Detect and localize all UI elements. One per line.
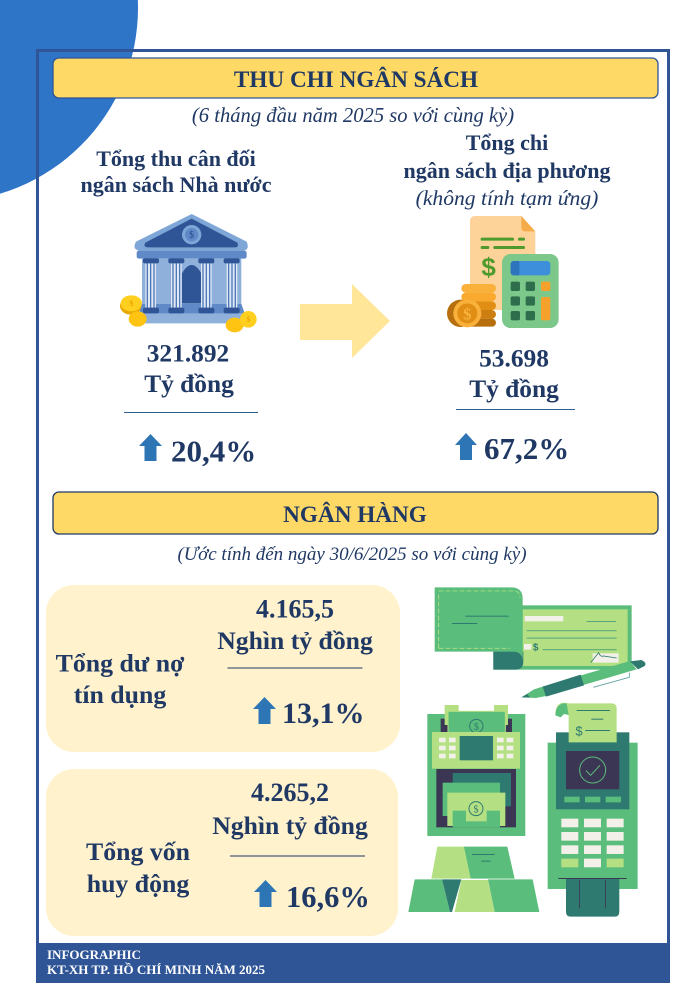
arrow: revenue to expenditure — [300, 284, 390, 358]
panel: mobilized capital — [46, 769, 398, 936]
icon: bank building: $ — [129, 299, 133, 308]
footer band — [36, 943, 670, 983]
panel: credit balance: 13,1% — [282, 697, 364, 730]
change: expenditure growth: 67,2% — [484, 431, 569, 466]
icon: invoice, coins and calculator — [447, 216, 559, 328]
icon: bank building: $ — [189, 230, 194, 241]
heading: total revenue: ngân sách Nhà nước — [80, 172, 272, 197]
heading: total revenue — [80, 146, 272, 197]
icon: invoice, coins and calculator: $ — [463, 304, 471, 323]
panel: credit balance: Nghìn tỷ đồng — [217, 626, 373, 655]
decorative blue circle — [0, 0, 138, 202]
panel: credit balance: tín dụng — [74, 680, 166, 709]
heading: total expenditure: (không tính tạm ứng) — [416, 186, 598, 210]
change: revenue growth: 20,4% — [171, 434, 256, 468]
subtitle: period: (6 tháng đầu năm 2025 so với cùng kỳ) — [192, 105, 514, 127]
heading: total expenditure: Tổng chi — [466, 130, 548, 155]
icon: cash counting machine: $ — [474, 722, 479, 733]
heading: total expenditure — [404, 130, 610, 210]
icon: card payment terminal — [548, 703, 638, 917]
panel: mobilized capital: Tổng vốn — [86, 837, 190, 866]
icon: cash counting machine: $ — [473, 805, 478, 816]
panel: credit balance: 4.165,5 — [256, 594, 334, 624]
panel: credit balance: Tổng dư nợ — [56, 648, 185, 678]
panel: mobilized capital: Nghìn tỷ đồng — [212, 811, 368, 840]
subtitle: estimate date: (Ước tính đến ngày 30/6/2025 so với cùng kỳ) — [177, 544, 527, 565]
icon: bank building: $ — [246, 315, 250, 324]
figure: total expenditure value: 53.698 — [479, 344, 549, 372]
icon: cash counting machine — [427, 705, 525, 836]
footer band: INFOGRAPHIC — [47, 947, 141, 962]
panel: mobilized capital: 16,6% — [286, 880, 370, 914]
section header: thu chi ngan sach: THU CHI NGÂN SÁCH — [234, 66, 478, 93]
section header: ngan hang: NGÂN HÀNG — [283, 501, 427, 528]
section header: ngan hang — [53, 492, 658, 534]
figure: total revenue value: 321.892 — [147, 340, 229, 368]
panel: credit balance — [46, 585, 400, 752]
panel: mobilized capital: 4.265,2 — [251, 778, 329, 807]
figure: total expenditure value: Tỷ đồng — [469, 375, 559, 403]
section header: thu chi ngan sach — [53, 58, 658, 98]
heading: total expenditure: ngân sách địa phương — [404, 158, 610, 183]
figure: total revenue value: Tỷ đồng — [144, 370, 234, 398]
icon: wallet, cheque and pen: $ — [533, 643, 539, 654]
icon: card payment terminal: $ — [575, 724, 583, 738]
panel: mobilized capital: huy động — [87, 869, 189, 898]
footer band: KT-XH TP. HỒ CHÍ MINH NĂM 2025 — [47, 962, 266, 977]
icon: invoice, coins and calculator: $ — [481, 252, 496, 282]
figure: total revenue value — [144, 340, 234, 398]
icon: gold bars — [408, 847, 539, 912]
figure: total expenditure value — [469, 344, 559, 403]
icon: bank building — [120, 214, 257, 332]
heading: total revenue: Tổng thu cân đối — [96, 146, 256, 171]
icon: wallet, cheque and pen — [435, 587, 645, 698]
